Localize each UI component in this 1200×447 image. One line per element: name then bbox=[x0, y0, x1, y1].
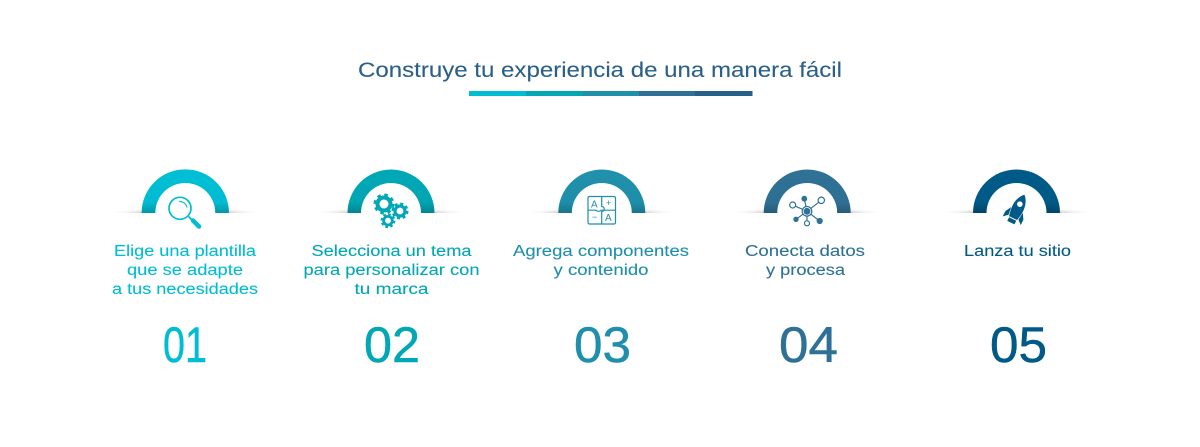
title underline bbox=[469, 91, 752, 96]
step 02 number: 02 bbox=[364, 317, 420, 373]
panel: step 05 bbox=[954, 170, 1079, 363]
title: Construye tu experiencia de una manera fácil bbox=[358, 58, 842, 82]
step 01 description bbox=[112, 243, 258, 298]
step 05 number: 05 bbox=[990, 317, 1047, 373]
step 02 description: Selecciona un tema bbox=[312, 243, 472, 260]
step 02 description: tu marca bbox=[354, 281, 429, 298]
step 04 description: Conecta datos bbox=[745, 243, 865, 260]
icon: puzzle: A bbox=[605, 213, 612, 224]
step 01 description: Elige una plantilla bbox=[114, 243, 257, 260]
semicircle arc with shadow bbox=[954, 170, 1079, 213]
icon: puzzle: − bbox=[592, 212, 597, 222]
step 01 description: a tus necesidades bbox=[112, 281, 258, 298]
step 04 description: y procesa bbox=[766, 262, 846, 279]
icon: magnifying glass bbox=[169, 197, 199, 226]
step 04 number: 04 bbox=[779, 317, 838, 373]
icon: puzzle: A bbox=[591, 200, 598, 210]
icon: network bbox=[790, 196, 824, 226]
semicircle arc with shadow bbox=[540, 170, 664, 213]
step 05 description: Lanza tu sitio bbox=[964, 243, 1071, 260]
icon: puzzle bbox=[588, 196, 616, 224]
step 01 description: que se adapte bbox=[127, 262, 243, 279]
step 03 description: Agrega componentes bbox=[513, 243, 689, 260]
semicircle arc with shadow bbox=[122, 169, 248, 213]
semicircle arc with shadow bbox=[744, 170, 870, 213]
panel: step 03 bbox=[513, 170, 689, 373]
icon: gears bbox=[375, 195, 407, 227]
step 01 number: 01 bbox=[163, 317, 207, 373]
step 02 description: para personalizar con bbox=[304, 262, 480, 279]
step 03 description bbox=[513, 243, 689, 279]
semicircle arc with shadow bbox=[328, 170, 454, 213]
step 03 description: y contenido bbox=[554, 262, 648, 279]
icon: rocket bbox=[1002, 190, 1033, 227]
icon: puzzle: + bbox=[606, 198, 611, 208]
panel: step 02 bbox=[304, 170, 480, 373]
step 04 description bbox=[745, 243, 865, 279]
step 03 number: 03 bbox=[574, 317, 631, 373]
step 02 description bbox=[304, 243, 480, 298]
panel: step 01 bbox=[112, 169, 258, 363]
panel: step 04 bbox=[744, 170, 870, 363]
